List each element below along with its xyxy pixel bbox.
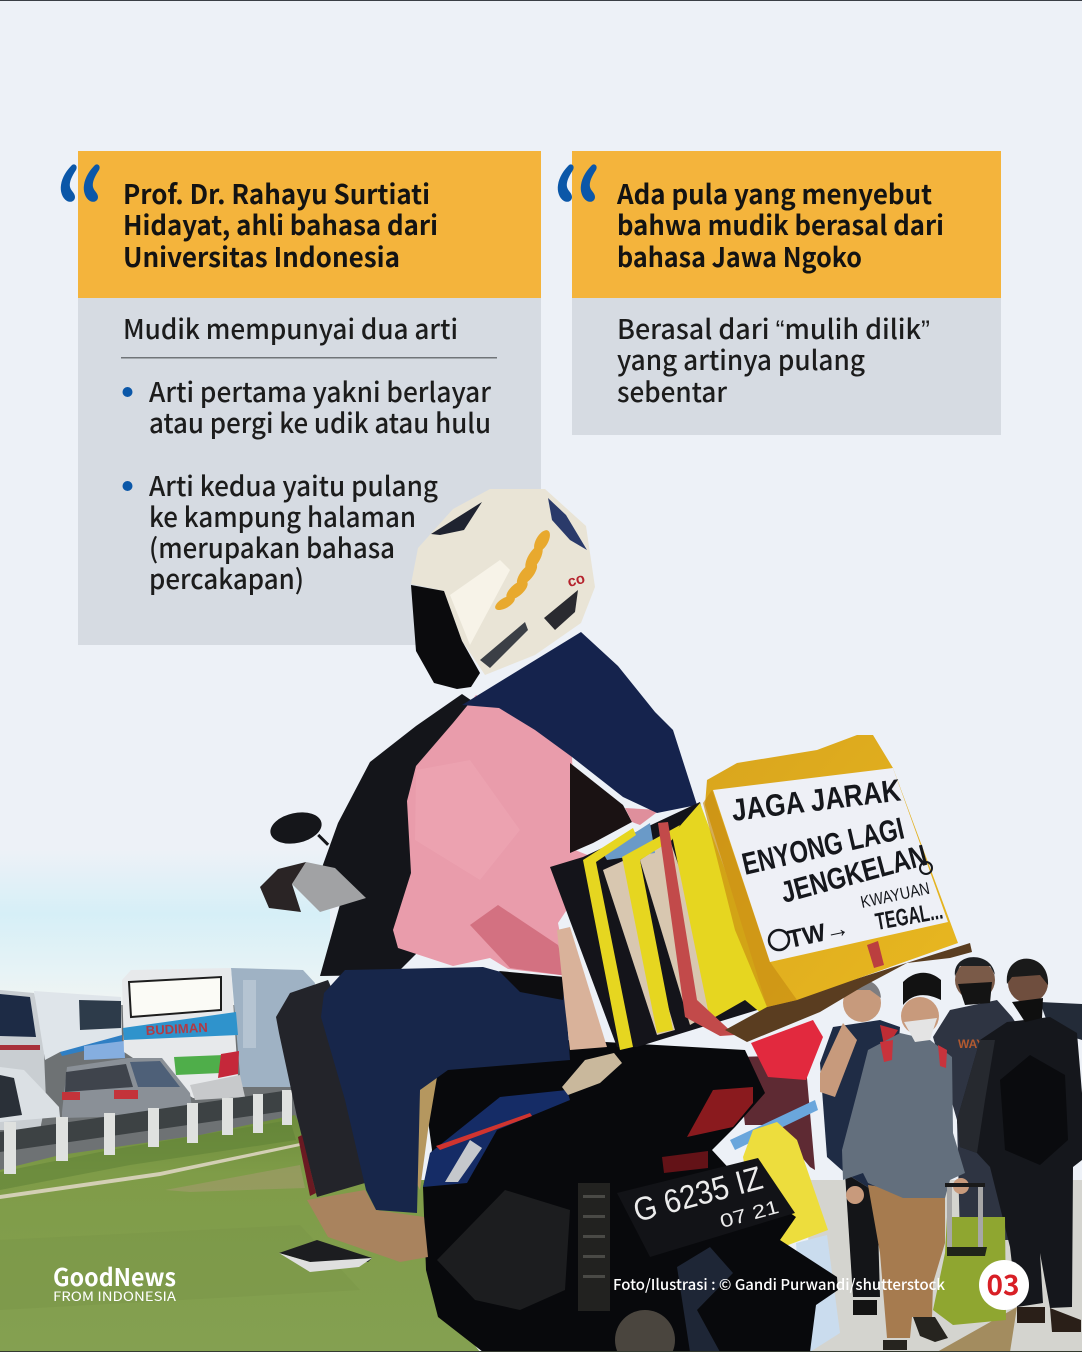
sandals xyxy=(883,1317,948,1350)
panel body: gray xyxy=(572,298,1001,435)
package: cardboard inside straps xyxy=(603,860,675,1035)
rear fender xyxy=(677,1247,733,1352)
bullet: second meaning xyxy=(122,465,438,597)
heading: Prof. Dr. Rahayu Surtiati: Prof. Dr. Rahayu Surtiati xyxy=(123,173,430,212)
package: handwritten sign: KWAYUAN xyxy=(859,879,931,912)
heading: Ada pula yang menyebut xyxy=(616,173,944,275)
heading: Prof. Dr. Rahayu Surtiati: Hidayat, ahli bahasa dari xyxy=(123,204,438,243)
mirror xyxy=(267,808,329,848)
car: gray xyxy=(62,1058,192,1118)
driver: glove xyxy=(260,862,306,912)
luggage rack and white tie xyxy=(562,1053,622,1095)
car: white xyxy=(0,1067,60,1122)
panel body: gray xyxy=(78,298,541,645)
photo: motorcycle with riders xyxy=(260,489,972,1352)
passenger: hair xyxy=(570,763,632,853)
page number badge: 03 xyxy=(986,1264,1020,1304)
package: handwritten sign: TW→ xyxy=(785,914,852,954)
bullet: second meaning: (merupakan bahasa xyxy=(149,527,395,566)
helmet xyxy=(411,489,595,689)
photo: crowd walking behind the motorcycle xyxy=(730,957,1082,1352)
bus: Budiman xyxy=(122,968,315,1100)
driver: pants xyxy=(276,980,365,1197)
package: red strap xyxy=(658,822,735,1036)
bullet: first meaning: Arti pertama yakni berlayar xyxy=(149,371,492,410)
license plate: G 6235 IZ xyxy=(629,1159,766,1229)
boy: gray shirt with suitcase xyxy=(842,973,969,1350)
text: Mudik mempunyai dua arti: Mudik mempunyai dua arti xyxy=(123,308,458,347)
suitcase: green xyxy=(933,1183,1006,1325)
passenger: navy hijab xyxy=(462,632,697,813)
package: yellow box xyxy=(705,735,958,1007)
photo credit: Foto/Ilustrasi : © Gandi Purwandi/shutterstock xyxy=(613,1274,945,1295)
package: wooden base xyxy=(725,943,972,1042)
motorcycle body xyxy=(420,1040,838,1352)
text: mulih dilik xyxy=(617,308,930,410)
taillight xyxy=(687,1087,753,1137)
photo: guardrail xyxy=(0,1090,292,1174)
man: blue shirt at back xyxy=(933,957,1040,1240)
bullet: second meaning: percakapan) xyxy=(149,558,304,597)
package: dark side xyxy=(550,802,767,1047)
bus: Budiman: BUDIMAN xyxy=(145,1020,208,1038)
body side panel blue xyxy=(423,1090,570,1187)
license plate xyxy=(617,1158,795,1257)
passenger: brown shoe xyxy=(307,1190,428,1262)
driver: black shoe xyxy=(279,1240,372,1272)
package: handwritten sign: ENYONG LAGI xyxy=(739,811,907,882)
passenger: jeans xyxy=(321,967,570,1213)
panel header: yellow xyxy=(572,151,1001,298)
bullet: first meaning: atau pergi ke udik atau hulu xyxy=(149,402,491,441)
photo: highway background with buses xyxy=(0,850,330,1185)
rear shock absorber xyxy=(578,1183,610,1311)
heading: Prof. Dr. Rahayu Surtiati: Universitas Indonesia xyxy=(123,236,400,275)
airbox cover xyxy=(437,1190,570,1310)
heading: Ada pula yang menyebut: Ada pula yang menyebut xyxy=(616,173,932,212)
text: mulih dilik: Berasal dari “mulih dilik” xyxy=(617,308,930,347)
helmet: co xyxy=(566,570,587,591)
panel: Prof. Rahayu definition xyxy=(61,151,541,645)
bag: leopard print xyxy=(403,1077,437,1190)
panel: Jawa Ngoko origin xyxy=(558,151,1001,435)
helmet: laurel emblem xyxy=(493,528,553,613)
boy: black jacket and backpack xyxy=(957,959,1082,1332)
heading: Ada pula yang menyebut: bahasa Jawa Ngoko xyxy=(617,236,862,275)
heading: Ada pula yang menyebut: bahwa mudik berasal dari xyxy=(617,204,944,243)
ribbon barrier xyxy=(730,1100,818,1150)
cloth: pale blue xyxy=(796,1235,840,1352)
man: blue shirt at back: WAY TO xyxy=(958,1037,1004,1051)
package: handwritten sign xyxy=(713,768,948,962)
passenger: pink jacket xyxy=(393,695,600,976)
bullet: second meaning: Arti kedua yaitu pulang xyxy=(149,465,438,504)
boy: hand to mouth xyxy=(820,980,900,1315)
panel header: yellow xyxy=(78,151,541,298)
driver: jacket xyxy=(320,694,500,976)
page number badge xyxy=(979,1260,1029,1310)
bus left xyxy=(0,990,125,1130)
cloth: yellow xyxy=(743,1122,828,1253)
text: mulih dilik: yang artinya pulang xyxy=(617,339,865,378)
package on motorcycle rack xyxy=(550,735,972,1050)
floor xyxy=(805,1180,1082,1352)
package: handwritten sign: JAGA JARAK xyxy=(730,772,903,828)
icon: opening quote mark xyxy=(558,164,597,202)
license plate: 07 21 xyxy=(718,1197,781,1233)
text: mulih dilik: sebentar xyxy=(617,371,728,410)
heading: Prof. Dr. Rahayu Surtiati xyxy=(123,173,438,275)
logo: GoodNews from Indonesia: GoodNews xyxy=(53,1258,176,1293)
package: yellow straps xyxy=(583,803,773,1050)
photo: grass field xyxy=(0,1115,480,1352)
driver: sleeve xyxy=(292,862,366,912)
package: blue top flap xyxy=(603,823,655,860)
logo: GoodNews from Indonesia: FROM INDONESIA xyxy=(53,1286,176,1305)
woman: red hijab and floral dress xyxy=(737,1020,823,1170)
passenger: black inner shirt xyxy=(499,971,565,1000)
package: handwritten sign: JENGKELAN xyxy=(777,839,931,910)
icon: opening quote mark xyxy=(61,164,100,202)
passenger: hanging strap xyxy=(557,927,607,1050)
package: handwritten sign: TEGAL... xyxy=(873,898,945,936)
bullet: first meaning xyxy=(122,371,492,441)
bullet: second meaning: ke kampung halaman xyxy=(149,496,416,535)
